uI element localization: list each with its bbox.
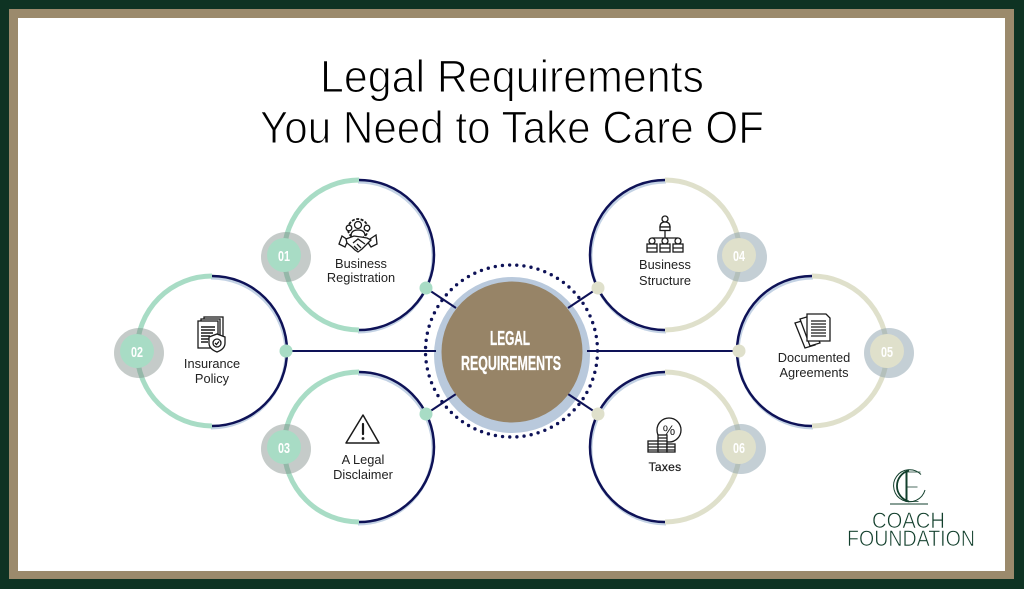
label: Business [335, 256, 387, 271]
label [333, 452, 394, 482]
logo wordmark [847, 508, 975, 551]
label [778, 350, 850, 380]
hub label: LEGAL [490, 328, 530, 350]
label: Taxes [649, 460, 681, 474]
step 01: Business Registration [261, 180, 434, 332]
step 06: Taxes [590, 372, 766, 524]
hub label: REQUIREMENTS [461, 353, 561, 375]
label: Structure [639, 273, 691, 288]
icon: stacked documents [795, 314, 830, 348]
step 03: A Legal Disclaimer: 03 [278, 440, 290, 457]
step 05: Documented Agreements [732, 276, 914, 428]
title [260, 51, 764, 153]
step 02: Insurance Policy: 02 [131, 344, 143, 361]
label: Policy [195, 371, 230, 386]
step 05: Documented Agreements: 05 [881, 344, 893, 361]
connector lines [286, 288, 739, 414]
logo mark [890, 470, 928, 504]
step 03: A Legal Disclaimer [261, 372, 434, 524]
icon: percent badge and coin stacks [648, 418, 681, 452]
label: A Legal [342, 452, 384, 467]
label: Disclaimer [333, 467, 394, 482]
icon: policy documents with shield [198, 317, 225, 352]
label: Agreements [780, 365, 848, 380]
icon: handshake and team gear [339, 219, 377, 252]
hub label [461, 328, 561, 375]
label: Insurance [184, 356, 240, 371]
label [327, 256, 395, 285]
icon: percent badge and coin stacks: % [663, 422, 675, 438]
central hub [286, 265, 739, 437]
step 04: Business Structure [590, 180, 767, 332]
title: Legal Requirements [320, 51, 704, 102]
label [639, 257, 691, 288]
step 02: Insurance Policy [114, 276, 292, 428]
label: Registration [327, 270, 395, 285]
logo: Coach Foundation [847, 470, 975, 551]
logo wordmark: FOUNDATION [847, 526, 975, 551]
label: Documented [778, 350, 850, 365]
step 01: Business Registration: 01 [278, 248, 290, 265]
logo wordmark: COACH [872, 508, 945, 533]
step 04: Business Structure: 04 [733, 248, 745, 265]
step 06: Taxes: 06 [733, 440, 745, 457]
label [184, 356, 240, 386]
label: Business [639, 257, 691, 272]
icon: warning triangle [346, 415, 379, 443]
title: You Need to Take Care OF [260, 102, 764, 153]
icon: organisation chart [647, 216, 683, 252]
